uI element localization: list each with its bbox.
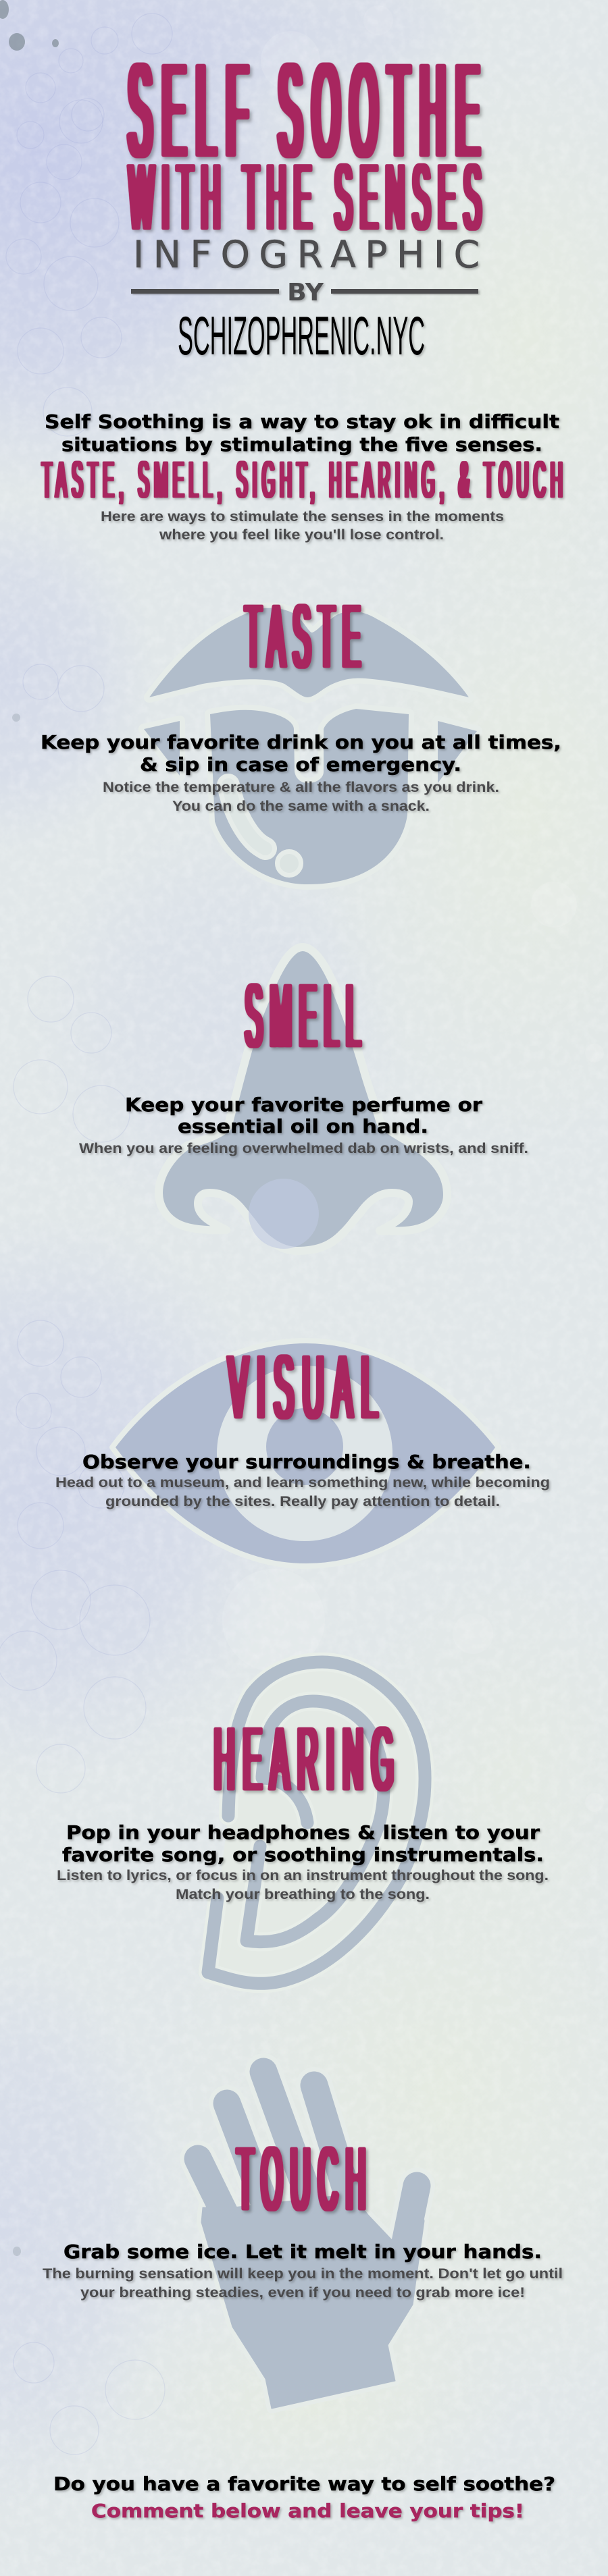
touch detail line 2: your breathing steadies, even if you need to grab more ice! xyxy=(80,2285,525,2301)
panel: visual xyxy=(55,1336,550,1566)
taste tip line 1: Keep your favorite drink on you at all times, xyxy=(41,732,561,753)
intro note line 2: where you feel like you'll lose control. xyxy=(159,527,444,543)
byline: by: BY xyxy=(287,279,324,306)
panel: closing call to action xyxy=(53,2473,555,2522)
subtitle: infographic: INFOGRAPHIC xyxy=(133,233,480,276)
hearing detail line 2: Match your breathing to the song. xyxy=(176,1887,430,1902)
panel: title block xyxy=(128,36,490,367)
panel: introduction xyxy=(42,411,567,543)
closing question: Do you have a favorite way to self soothe? xyxy=(53,2473,555,2495)
intro note line 1: Here are ways to stimulate the senses in the moments xyxy=(101,509,504,525)
touch tip: Grab some ice. Let it melt in your hands. xyxy=(64,2241,542,2263)
smell tip line 1: Keep your favorite perfume or xyxy=(125,1094,482,1116)
intro line 2: situations by stimulating the five senses. xyxy=(61,434,542,456)
touch detail line 1: The burning sensation will keep you in the moment. Don't let go until xyxy=(43,2266,563,2282)
icon: nose xyxy=(159,947,447,1251)
closing prompt: Comment below and leave your tips! xyxy=(91,2500,524,2522)
byline rule right xyxy=(331,289,478,294)
smell tip line 2: essential oil on hand. xyxy=(178,1116,428,1137)
icon: eye xyxy=(112,1341,499,1566)
visual detail line 2: grounded by the sites. Really pay attention to detail. xyxy=(105,1494,500,1509)
taste detail line 2: You can do the same with a snack. xyxy=(172,799,430,814)
visual tip: Observe your surroundings & breathe. xyxy=(82,1451,531,1473)
icon: lips xyxy=(144,608,477,884)
taste detail line 1: Notice the temperature & all the flavors as you drink. xyxy=(103,780,499,795)
smell detail: When you are feeling overwhelmed dab on wrists, and sniff. xyxy=(79,1141,528,1156)
panel: hearing xyxy=(57,1662,549,1983)
hearing tip line 2: favorite song, or soothing instrumentals. xyxy=(62,1844,544,1866)
panel: smell xyxy=(79,947,528,1251)
visual detail line 1: Head out to a museum, and learn something new, while becoming xyxy=(55,1475,550,1491)
hearing detail line 1: Listen to lyrics, or focus in on an instrument throughout the song. xyxy=(57,1868,549,1883)
panel: taste xyxy=(41,585,561,884)
icon: ear xyxy=(208,1662,425,1983)
icon: hand xyxy=(198,2072,424,2409)
panel: touch xyxy=(43,2072,563,2409)
taste tip line 2: & sip in case of emergency. xyxy=(140,754,461,776)
intro line 1: Self Soothing is a way to stay ok in difficult xyxy=(45,411,559,433)
hearing tip line 1: Pop in your headphones & listen to your xyxy=(66,1822,540,1844)
byline rule left xyxy=(131,289,279,294)
